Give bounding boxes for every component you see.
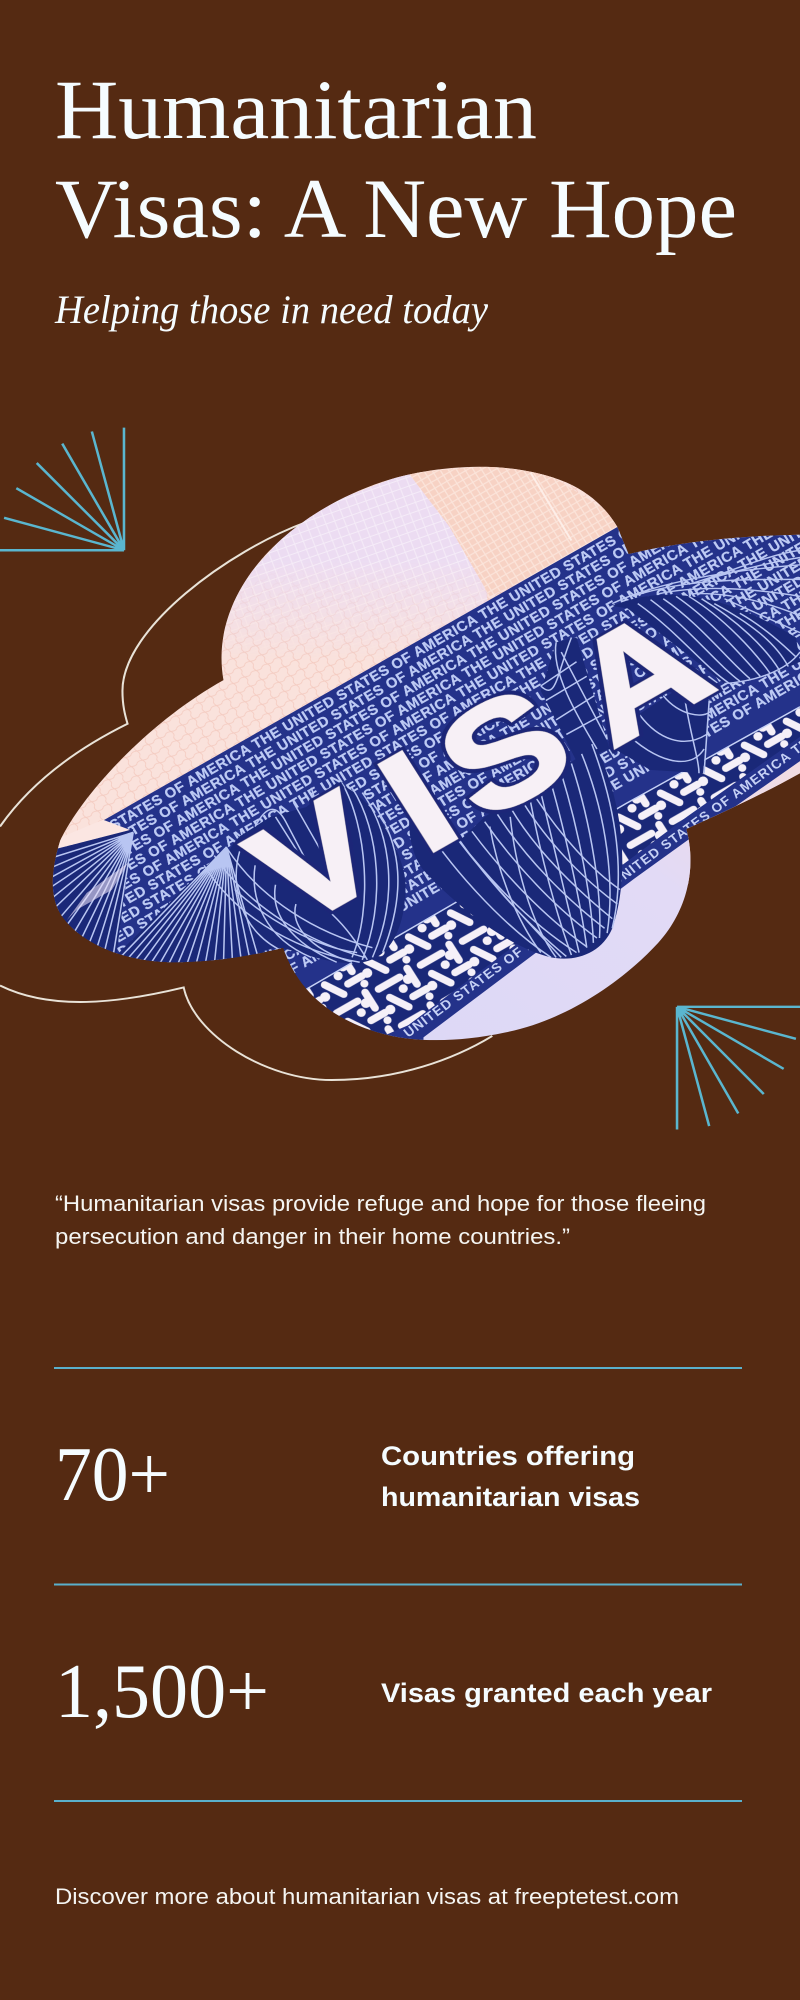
quote	[55, 1191, 706, 1249]
pink paper wedge at left end of band	[58, 820, 130, 848]
paper: upper security paper	[52, 466, 800, 885]
quote: “Humanitarian visas provide refuge and hope for those fleeing	[55, 1191, 706, 1216]
stat: visas granted yearly: Visas granted each year	[381, 1678, 713, 1708]
paper: lower security paper	[358, 764, 800, 1040]
hero illustration: visa photo in cloud shape	[0, 428, 800, 1130]
quote: persecution and danger in their home countries.”	[55, 1224, 570, 1249]
guilloche: fine line curves	[51, 550, 800, 965]
title	[55, 63, 737, 256]
bone pattern strip	[301, 707, 800, 1049]
rule above bone strip	[301, 707, 800, 992]
navy printed band	[52, 527, 800, 1040]
stat: countries offering visas: Countries offering	[381, 1441, 635, 1471]
highlight on left fan	[67, 863, 128, 920]
stat: countries offering visas: humanitarian visas	[381, 1482, 640, 1512]
visa photo	[52, 466, 800, 1040]
stat: countries offering visas: 70+	[55, 1431, 170, 1517]
footer call to action: Discover more about humanitarian visas at freeptetest.com	[55, 1884, 679, 1909]
stat: visas granted yearly: 1,500+	[55, 1648, 269, 1734]
title: Humanitarian	[55, 63, 537, 157]
guilloche: dark blobs	[46, 595, 800, 967]
large VISA lettering: VISA	[222, 575, 736, 957]
subtitle: Helping those in need today	[54, 287, 488, 332]
title: Visas: A New Hope	[55, 162, 737, 256]
stat: countries offering visas	[55, 1431, 640, 1517]
stat: visas granted yearly	[55, 1648, 713, 1734]
icon: bottom-right sunburst	[677, 1007, 800, 1129]
icon: top-left sunburst	[0, 428, 124, 550]
cloud outline	[0, 522, 492, 1080]
